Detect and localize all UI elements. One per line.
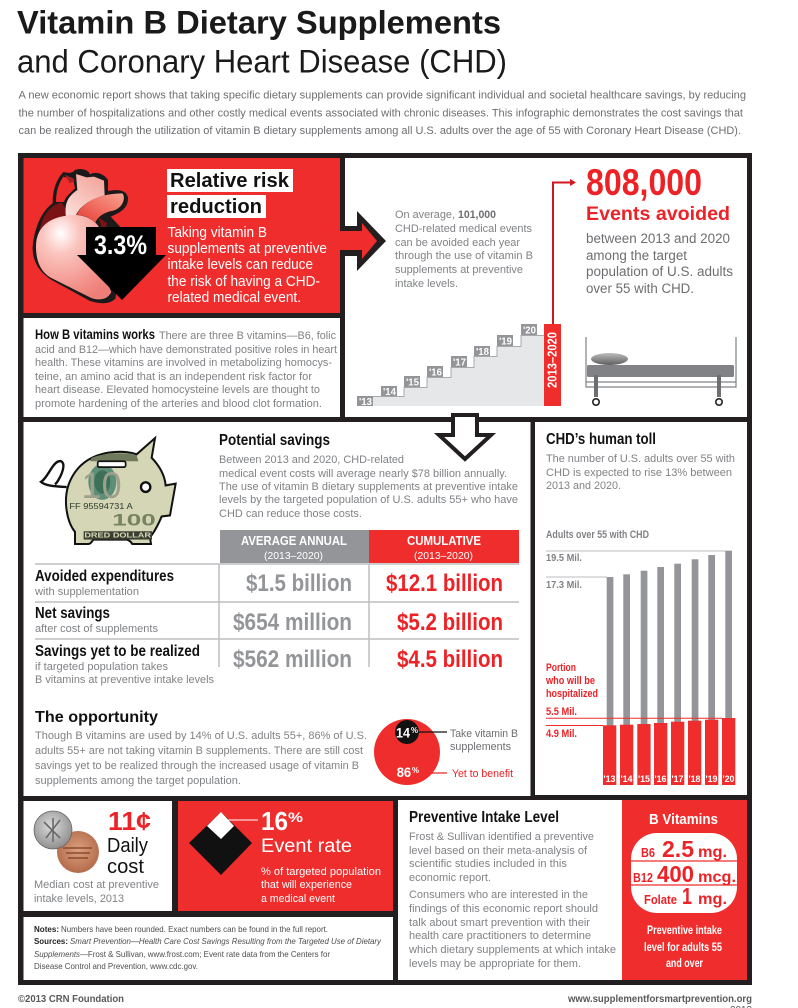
bar: 2013–2020 with arrow to total — [544, 179, 576, 406]
chart: staircase of years: '14 — [383, 387, 396, 398]
footer — [18, 994, 752, 1008]
panel: how B vitamins works: teine, an amino acid that is an independent risk factor for — [35, 371, 312, 383]
chart: usage pie: Yet to benefit — [452, 768, 513, 780]
row: avoided expenditures: $1.5 billion — [246, 570, 352, 597]
intro paragraph: can be realized through the utilization of vitamin B dietary supplements among all U.S. adults over the age of 55 with Coronary Heart Disease (CHD). — [18, 125, 741, 137]
text: risk description: related medical event. — [168, 290, 301, 306]
chart: usage pie: 14 — [396, 724, 410, 740]
text: opportunity description — [35, 730, 367, 787]
chart: adults over 55 with CHD: '15 — [638, 774, 651, 785]
pill: dosage table: 2.5 — [662, 836, 694, 862]
panel: potential savings — [24, 422, 530, 796]
panel: preventive intake level: findings of this economic report should — [409, 903, 598, 915]
chart: adults over 55 with CHD: '13 — [604, 774, 616, 785]
intro paragraph: A new economic report shows that taking specific dietary supplements can provide significant individual and societal healthcare savings, by reducing — [18, 90, 746, 102]
text: 101,000 events per year: intake levels. — [395, 278, 458, 290]
row: net savings: after cost of supplements — [35, 623, 159, 635]
row: net savings: $654 million — [233, 609, 352, 636]
panel: daily cost: cost — [107, 856, 144, 878]
chart: adults over 55 with CHD — [545, 529, 735, 785]
chart: adults over 55 with CHD: 19.5 Mil. — [546, 552, 582, 564]
chart: usage pie: % — [412, 766, 419, 775]
heading: potential savings: Potential savings — [219, 432, 330, 449]
chart: usage pie — [374, 719, 518, 785]
panel: event rate — [178, 801, 393, 911]
panel: notes and sources: Disease Control and Prevention, www.cdc.gov. — [34, 961, 198, 971]
text: 101,000 events per year: 101,000 — [458, 209, 496, 221]
text: savings description: levels by the targeted population of U.S. adults 55+ who have — [219, 494, 518, 506]
text: risk description: intake levels can reduce — [168, 257, 313, 273]
panel: event rate: 16 — [261, 806, 288, 836]
arrow: red arrow from risk reduction panel — [338, 211, 386, 271]
row: savings yet to be realized: if targeted population takes — [35, 661, 169, 673]
icon: piggy bank made of a 100 dollar bill — [41, 438, 176, 544]
footer: www.supplementforsmartprevention.org — [567, 994, 752, 1005]
row: avoided expenditures — [34, 568, 503, 598]
panel: daily cost — [24, 801, 172, 911]
chart: staircase of years: '19 — [499, 336, 512, 348]
chart: usage pie: supplements — [450, 741, 512, 753]
panel: preventive intake level: economic report. — [409, 872, 491, 884]
panel: CHD's human toll: CHD’s human toll — [546, 431, 656, 448]
row: net savings: Net savings — [35, 605, 110, 622]
heading: the opportunity: The opportunity — [35, 709, 158, 726]
table: savings — [34, 530, 519, 686]
row: net savings: $5.2 billion — [397, 609, 503, 636]
chart: staircase of years: '17 — [453, 358, 466, 368]
icon: coins — [34, 811, 99, 873]
panel: preventive intake level: Preventive Intake Level — [409, 809, 559, 826]
icon: piggy bank made of a 100 dollar bill: FF 95594731 A — [69, 502, 133, 511]
row: avoided expenditures: Avoided expenditures — [35, 568, 174, 585]
panel: how B vitamins works — [24, 318, 340, 417]
intro paragraph: the number of hospitalizations and other costly medical events associated with chronic diseases. This infographic demonstrates the cost savings that — [18, 107, 743, 119]
chart: adults over 55 with CHD: who will be — [545, 675, 595, 687]
icon: piggy bank made of a 100 dollar bill: 10 — [82, 465, 122, 506]
heading: relative risk reduction — [167, 169, 293, 218]
chart: adults over 55 with CHD: '14 — [620, 774, 633, 785]
text: savings description: medical event costs will average nearly $78 billion annually. — [219, 468, 507, 480]
panel: relative risk reduction — [24, 158, 340, 313]
icon: piggy bank made of a 100 dollar bill: DRED DOLLAR — [84, 532, 151, 540]
panel: daily cost: 11¢ — [108, 806, 151, 836]
icon: heart — [33, 169, 128, 303]
row: net savings — [35, 605, 503, 636]
title: Vitamin B Dietary Supplements — [17, 4, 501, 40]
panel: how B vitamins works: heart disease. Elevated homocysteine levels are thought to — [35, 384, 320, 396]
pill: dosage table — [631, 833, 737, 913]
chart: adults over 55 with CHD: Portion — [546, 662, 576, 674]
chart: usage pie: 86 — [397, 764, 411, 780]
icon: down arrow with 3.3% — [77, 227, 166, 300]
row: avoided expenditures: $12.1 billion — [386, 570, 503, 597]
stat: 808,000 events avoided — [586, 162, 733, 296]
icon: piggy bank made of a 100 dollar bill: 100 — [112, 512, 156, 530]
pill: dosage table: B6 — [641, 845, 655, 860]
outer frame — [18, 153, 752, 985]
footer: ©2013 CRN Foundation — [18, 994, 124, 1005]
row: avoided expenditures: with supplementation — [34, 586, 139, 598]
panel: notes and sources: Supplements — [34, 949, 81, 959]
chart: adults over 55 with CHD: 5.5 Mil. — [546, 706, 577, 718]
heading: relative risk reduction: Relative risk — [170, 169, 290, 192]
panel: event rate: % — [288, 809, 304, 825]
panel: notes and sources: Numbers have been rounded. Exact numbers can be found in the full report. — [61, 924, 328, 934]
text: 101,000 events per year: supplements at preventive — [395, 264, 523, 276]
panel: preventive intake level: Frost & Sullivan identified a preventive — [409, 831, 594, 843]
chart: usage pie: % — [411, 726, 418, 735]
bar: 2013–2020 with arrow to total: 2013–2020 — [546, 332, 560, 388]
text: savings description — [219, 454, 518, 520]
chart: adults over 55 with CHD: '17 — [672, 774, 684, 785]
chart: adults over 55 with CHD: '19 — [706, 774, 718, 785]
chart: staircase of years: '15 — [406, 378, 419, 388]
chart: adults over 55 with CHD: '20 — [722, 774, 734, 785]
chart: usage pie: Take vitamin B — [450, 728, 518, 740]
chart: staircase of years: '20 — [523, 326, 536, 336]
panel: how B vitamins works: promote hardening of the arteries and blood clot formation. — [35, 398, 322, 410]
row: savings yet to be realized: B vitamins at preventive intake levels — [35, 674, 215, 686]
icon: hospital bed — [586, 337, 736, 405]
row: savings yet to be realized: $4.5 billion — [397, 646, 503, 673]
panel: daily cost: Daily — [107, 835, 148, 857]
panel: CHD's human toll: CHD is expected to rise 13% between — [546, 467, 732, 479]
chart: adults over 55 with CHD: '16 — [654, 774, 666, 785]
chart: staircase of years: '13 — [359, 397, 372, 408]
text: opportunity description: Though B vitamins are used by 14% of U.S. adults 55+, 86% of U.S. — [35, 730, 367, 742]
text: savings description: Between 2013 and 2020, CHD-related — [219, 454, 404, 466]
chart: adults over 55 with CHD: 17.3 Mil. — [546, 579, 582, 591]
panel: preventive intake level: scientific studies included in this — [409, 858, 568, 870]
chart: adults over 55 with CHD: 4.9 Mil. — [546, 728, 577, 740]
table: savings: (2013–2020) — [264, 551, 323, 562]
panel: notes and sources: Sources: — [34, 936, 68, 946]
panel: daily cost: Median cost at preventive — [34, 879, 159, 891]
arrow: hollow down arrow — [439, 415, 491, 459]
panel: B vitamins — [622, 800, 747, 980]
panel: B vitamins: Preventive intake — [647, 923, 722, 937]
chart: staircase of years — [357, 324, 544, 408]
title: and Coronary Heart Disease (CHD) — [17, 44, 507, 80]
text: 101,000 events per year: can be avoided each year — [395, 237, 520, 249]
stat: 808,000 events avoided: 808,000 — [586, 162, 702, 203]
panel: CHD's human toll: 2013 and 2020. — [546, 480, 621, 492]
panel: how B vitamins works: There are three B vitamins—B6, folic — [159, 330, 337, 342]
row: savings yet to be realized — [35, 643, 503, 686]
text: risk description: the risk of having a CHD- — [168, 274, 320, 290]
panel: preventive intake level: levels may be appropriate for them. — [409, 958, 581, 970]
table: savings: (2013–2020) — [414, 551, 473, 562]
panel: B vitamins: level for adults 55 — [644, 940, 722, 954]
text: risk description: Taking vitamin B — [168, 225, 267, 241]
title — [17, 4, 507, 80]
chart: staircase of years: '16 — [429, 368, 442, 378]
panel: preventive intake level: Consumers who are interested in the — [409, 889, 588, 901]
stat: 808,000 events avoided: over 55 with CHD. — [586, 281, 694, 296]
text: 101,000 events per year: CHD-related medical events — [395, 223, 533, 235]
panel: how B vitamins works: How B vitamins works — [35, 326, 155, 342]
stat: 808,000 events avoided: among the target — [586, 248, 687, 263]
pill: dosage table: Folate — [644, 892, 677, 907]
table: savings: AVERAGE ANNUAL — [241, 534, 347, 548]
pill: dosage table: mg. — [698, 891, 727, 908]
panel: CHD's human toll: The number of U.S. adults over 55 with — [546, 453, 735, 465]
icon: diamond — [189, 812, 258, 875]
panel: B vitamins: and over — [666, 956, 703, 970]
pill: dosage table: B12 — [633, 870, 653, 885]
panel: preventive intake level: health care practitioners to determine — [409, 930, 591, 942]
intro paragraph — [18, 90, 746, 137]
panel: preventive intake level — [398, 800, 622, 980]
panel: notes and sources: Notes: — [34, 924, 59, 934]
panel: notes and sources: Smart Prevention—Health Care Cost Savings Resulting from the Targeted Use of Dietary — [70, 936, 382, 946]
panel: event rate: a medical event — [261, 893, 335, 905]
pill: dosage table: 400 — [657, 861, 694, 887]
panel: daily cost: intake levels, 2013 — [34, 893, 124, 905]
text: savings description: The use of vitamin B dietary supplements at preventive intake — [219, 481, 518, 493]
panel: how B vitamins works: health. These vitamins are involved in metabolizing homocys- — [35, 357, 332, 369]
stat: 808,000 events avoided: population of U.S. adults — [586, 264, 733, 279]
panel: notes and sources: —Frost & Sullivan, www.frost.com; Event rate data from the Centers for — [80, 949, 330, 959]
chart: adults over 55 with CHD: Adults over 55 with CHD — [546, 529, 649, 541]
row: savings yet to be realized: $562 million — [233, 646, 352, 673]
text: 101,000 events per year: On average, — [395, 209, 455, 221]
text: opportunity description: adults 55+ are not taking vitamin B supplements. There are still cost — [35, 745, 363, 757]
panel: CHD's human toll — [535, 422, 747, 795]
panel: event rate: % of targeted population — [261, 866, 381, 878]
panel: event rate: Event rate — [261, 835, 352, 857]
table: savings: CUMULATIVE — [407, 534, 481, 548]
panel: preventive intake level: which dietary supplements at which intake — [408, 944, 616, 956]
pill: dosage table: 1 — [682, 883, 692, 909]
chart: adults over 55 with CHD: '18 — [688, 774, 700, 785]
text: risk description: supplements at preventive — [168, 241, 327, 257]
panel: B vitamins: B Vitamins — [649, 811, 718, 828]
text: savings description: CHD can reduce those costs. — [219, 508, 362, 520]
text: opportunity description: savings yet to be realized through the increased usage of vitamin B — [35, 760, 359, 772]
text: opportunity description: supplements among the target population. — [35, 775, 241, 787]
stat: 808,000 events avoided: between 2013 and 2020 — [586, 231, 730, 246]
text: 101,000 events per year: through the use of vitamin B — [395, 250, 533, 262]
text: 101,000 events per year — [395, 209, 533, 290]
panel: events avoided — [345, 158, 747, 417]
panel: preventive intake level: level based on their meta-analysis of — [409, 845, 588, 857]
row: savings yet to be realized: Savings yet to be realized — [35, 643, 200, 660]
text: risk description — [168, 225, 327, 306]
chart: adults over 55 with CHD: hospitalized — [546, 688, 598, 700]
stat: 808,000 events avoided: Events avoided — [586, 203, 730, 225]
panel: event rate: that will experience — [261, 879, 352, 891]
heading: relative risk reduction: reduction — [170, 195, 262, 218]
panel: notes and sources — [24, 917, 393, 980]
icon: down arrow with 3.3%: 3.3% — [94, 230, 147, 260]
panel: how B vitamins works: acid and B12—which have demonstrated positive roles in heart — [35, 344, 337, 356]
pill: dosage table: mg. — [698, 844, 727, 861]
panel: preventive intake level: talk about smart prevention with their — [409, 917, 590, 929]
chart: staircase of years: '18 — [476, 347, 489, 358]
pill: dosage table: mcg. — [698, 869, 736, 886]
